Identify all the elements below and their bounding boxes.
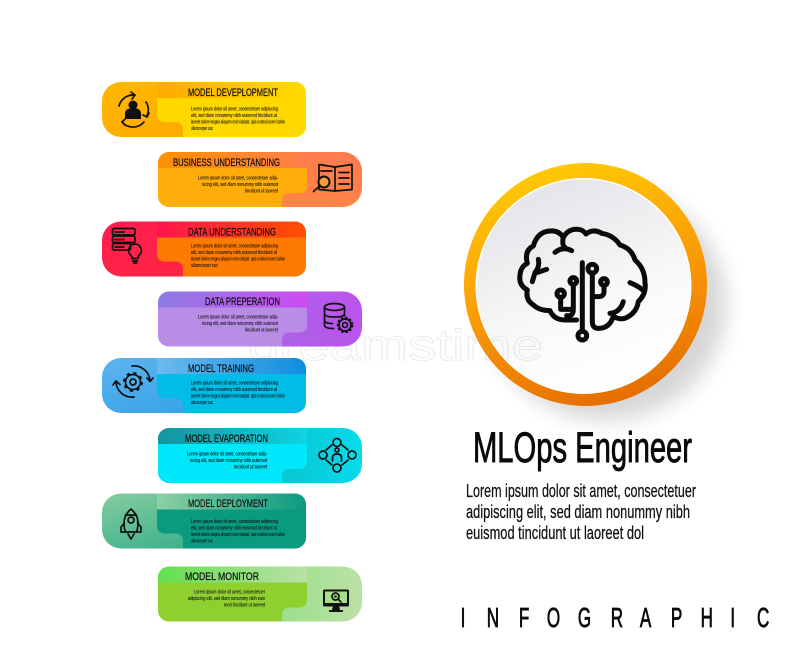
icon: servers with light bulb xyxy=(112,228,141,263)
heading: model training: MODEL TRAINING xyxy=(188,363,254,375)
watermark: dreamstime xyxy=(248,321,543,370)
heading: model monitor: MODEL MONITOR xyxy=(185,571,259,583)
body text: model evaporation: Lorem ipsum dolor sit amet, consectetuer adip- xyxy=(187,452,267,458)
icon: person with cycle arrows xyxy=(119,92,149,127)
heading: model deployment: MODEL DEPLOYMENT xyxy=(188,498,268,510)
body text: data understanding: laoreet dolore magna aliquam erat volutpat. quis nostrud exerci tation xyxy=(191,256,285,262)
body text: model deployment: laoreet dolore magna aliquam erat volutpat. quis nostrud exerci tation xyxy=(191,532,285,538)
body text: model training: Lorem ipsum dolor sit amet, consectetuer adipiscing xyxy=(191,380,278,386)
body text: model deployment: elit, sed diam nonummy nibh euismod tincidunt ut xyxy=(191,526,277,532)
card: model training xyxy=(102,358,306,413)
body text: data understanding: ullamcorper suc xyxy=(191,263,218,269)
body text: data preperation: iscing elit, sed diam nonummy nibh euismod xyxy=(202,321,278,327)
card: model evaporation xyxy=(158,428,362,483)
icon: brain with circuit xyxy=(520,229,645,340)
body text: model development: elit, sed diam nonummy nibh euismod tincidunt ut xyxy=(191,113,277,119)
body text: model development xyxy=(191,106,285,132)
body text: model deployment xyxy=(191,519,285,544)
footer label: infographic: INFOGRAPHIC xyxy=(461,602,769,633)
body text: data preperation xyxy=(198,314,278,334)
body text: data preperation: tincidunt ut laoreet xyxy=(245,328,278,334)
title: MLOps Engineer xyxy=(473,424,692,472)
heading: model evaporation: MODEL EVAPORATION xyxy=(185,433,268,445)
icon: gear with cycle arrows xyxy=(113,366,153,397)
body text: model training: elit, sed diam nonummy nibh euismod tincidunt ut xyxy=(191,387,277,393)
card: model monitor xyxy=(158,566,362,622)
body text: model development: ullamcorper suc xyxy=(191,126,213,132)
card: data preperation xyxy=(158,292,362,346)
body text: data understanding: elit, sed diam nonummy nibh euismod tincidunt ut xyxy=(191,250,277,256)
body text: data understanding xyxy=(191,244,285,269)
body text: model monitor: Lorem ipsum dolor sit amet, consectetuer xyxy=(194,590,265,596)
body text: model evaporation xyxy=(187,452,267,470)
body text: business understanding: tincidunt ut laoreet xyxy=(245,188,278,194)
body text: business understanding: iscing elit, sed diam nonummy nibh euismod xyxy=(202,182,278,188)
badge: circle with brain xyxy=(464,163,726,420)
description text: euismod tincidunt ut laoreet dol xyxy=(466,523,644,543)
body text: business understanding: Lorem ipsum dolor sit amet, consectetuer adip- xyxy=(198,176,278,182)
body text: business understanding xyxy=(198,176,278,194)
body text: model evaporation: tincidunt ut laoreet xyxy=(234,464,267,470)
body text: model training xyxy=(191,380,285,406)
heading: data preperation: DATA PREPERATION xyxy=(205,296,280,308)
body text: model monitor: adipiscing elit, sed diam nonummy nibh euis xyxy=(188,596,265,602)
icon: monitor with magnifier xyxy=(323,590,349,612)
icon: book with magnifier xyxy=(314,164,352,192)
body text: model development: laoreet dolore magna aliquam erat volutpat. quis nostrud exerci tation xyxy=(191,120,285,126)
icon: network around person xyxy=(319,438,356,472)
card: business understanding xyxy=(158,152,362,207)
heading: business understanding: BUSINESS UNDERSTANDING xyxy=(173,157,280,169)
heading: model development: MODEL DEVEPLOPMENT xyxy=(188,87,278,99)
card: model development xyxy=(102,82,306,137)
description text: adipiscing elit, sed diam nonummy nibh xyxy=(466,502,690,522)
icon: database with gear xyxy=(324,304,352,332)
description text xyxy=(466,481,696,543)
body text: model training: laoreet dolore magna aliquam erat volutpat. quis nostrud exerci tation xyxy=(191,394,285,400)
icon: rocket xyxy=(121,509,141,539)
body text: model monitor xyxy=(188,590,265,608)
description text: Lorem ipsum dolor sit amet, consectetuer xyxy=(466,481,696,501)
body text: model evaporation: iscing elit, sed diam nonummy nibh euismod xyxy=(190,458,267,464)
body text: model deployment: ullamcorper suc xyxy=(191,538,213,544)
body text: model development: Lorem ipsum dolor sit amet, consectetuer adipiscing xyxy=(191,106,278,112)
body text: model training: ullamcorper suc xyxy=(191,400,213,406)
body text: data preperation: Lorem ipsum dolor sit amet, consectetuer adip- xyxy=(198,314,278,320)
body text: model deployment: Lorem ipsum dolor sit amet, consectetuer adipiscing xyxy=(191,519,278,525)
body text: data understanding: Lorem ipsum dolor sit amet, consectetuer adipiscing xyxy=(191,244,278,250)
heading: data understanding: DATA UNDERSTANDING xyxy=(188,226,276,238)
card: model deployment xyxy=(102,494,306,548)
card: data understanding xyxy=(102,222,306,276)
body text: model monitor: mod tincidunt ut laoreet xyxy=(224,602,265,608)
